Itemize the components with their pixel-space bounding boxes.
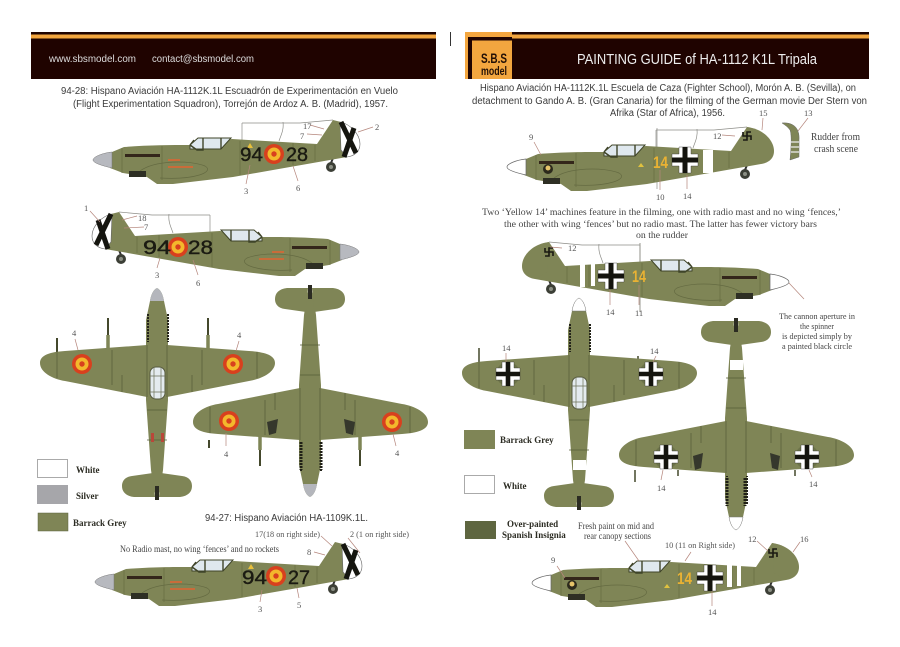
header: right banner	[465, 32, 869, 79]
aircraft: 94-28 right profile	[84, 203, 359, 288]
caption: Escuela de Caza: detachment to Gando A. B. (Gran Canaria) for the filming of the German movie Der Stern von	[472, 96, 867, 107]
aircraft: 94-28 right profile: 1	[84, 203, 88, 213]
header: left banner	[31, 32, 436, 79]
note: fresh paint: rear canopy sections	[584, 531, 651, 541]
legend: right colours: Over-painted	[507, 519, 558, 529]
caption: 94-28: 94-28: Hispano Aviación HA-1112K.1L Escuadrón de Experimentación en Vuelo	[61, 86, 398, 97]
contact email: contact@sbsmodel.com	[152, 54, 254, 65]
note: cannon aperture: The cannon aperture in	[779, 311, 856, 321]
aircraft: 94-27 profile: 5	[297, 600, 301, 610]
aircraft: 94-27 profile: 3	[258, 604, 262, 614]
aircraft: Yellow 14 left profile: 9	[529, 132, 533, 142]
aircraft: Spanish top view: 4	[72, 328, 77, 338]
S.B.S logo: model	[481, 64, 507, 78]
aircraft: Spanish top view: 4	[237, 330, 242, 340]
aircraft: 94-28 left profile: 3	[244, 186, 248, 196]
caption: Escuela de Caza: Hispano Aviación HA-1112K.1L Escuela de Caza (Fighter School), Morón A. B. (Sevilla), on	[480, 83, 856, 94]
note: fresh paint: Fresh paint on mid and	[578, 521, 654, 531]
aircraft: Yellow 14 left profile: 13	[804, 108, 812, 118]
aircraft: 94-28 left profile: 6	[296, 183, 300, 193]
aircraft: 94-28 right profile: 6	[196, 278, 200, 288]
aircraft: Yellow 14 left profile: 14	[653, 153, 668, 172]
aircraft: Yellow 14 right profile	[522, 242, 804, 318]
aircraft: Yellow 14 right profile: 14	[632, 267, 646, 286]
swatch: silver	[37, 485, 68, 504]
legend: left colours: Barrack Grey	[73, 518, 127, 528]
swatch: barrack grey	[464, 430, 495, 449]
aircraft: Yellow 14 lower profile: 16	[800, 534, 808, 544]
aircraft: Yellow 14 right profile: 14	[606, 307, 615, 317]
legend: right colours: Barrack Grey	[500, 435, 554, 445]
icon: rudder from crash scene: Rudder from	[811, 132, 860, 143]
note: two Yellow 14 machines: Two ‘Yellow 14’ machines feature in the filming, one with radio mast and no wing ‘fences,’	[482, 207, 841, 218]
icon: rudder from crash scene: crash scene	[814, 144, 859, 155]
aircraft: German bottom view: 14	[657, 483, 666, 493]
aircraft: Yellow 14 lower profile: 14	[677, 569, 692, 588]
caption: 94-28: (Flight Experimentation Squadron), Torrejón de Ardoz A. B. (Madrid), 1957.	[73, 99, 388, 110]
aircraft: Yellow 14 lower profile: 12	[748, 534, 756, 544]
swatch: white	[38, 460, 68, 478]
caption: 94-28	[61, 86, 398, 110]
aircraft: 94-28 right profile: 18	[138, 213, 146, 223]
legend: left colours	[37, 460, 127, 531]
aircraft: 94-27 profile: 27	[288, 568, 310, 589]
note: two Yellow 14 machines	[482, 207, 841, 241]
icon: rudder from crash scene	[782, 123, 860, 160]
caption: Escuela de Caza: Afrika (Star of Africa), 1956.	[610, 108, 725, 119]
aircraft: Yellow 14 lower profile: 14	[708, 607, 717, 617]
swatch: white	[464, 476, 494, 494]
note: fresh paint	[578, 521, 654, 541]
aircraft: Yellow 14 left profile	[507, 108, 812, 202]
note: two Yellow 14 machines: the other with wing ‘fences’ but no radio mast. The latter has fewer victory bars	[504, 219, 817, 230]
note: cannon aperture	[779, 311, 856, 351]
aircraft: Yellow 14 left profile: 10	[656, 192, 664, 202]
legend: right colours: White	[503, 481, 527, 491]
aircraft: Yellow 14 left profile: 12	[713, 131, 722, 141]
aircraft: 94-28 left profile: 17	[303, 121, 312, 131]
aircraft: German top view: 14	[502, 343, 511, 353]
aircraft: 94-28 right profile: 28	[188, 238, 213, 259]
aircraft: 94-28 left profile: 94	[240, 145, 263, 166]
aircraft: German top view	[462, 298, 697, 510]
swatch: over-painted	[465, 521, 496, 539]
note: cannon aperture: the spinner	[800, 321, 834, 331]
aircraft: 94-28 left profile	[93, 120, 379, 196]
aircraft: Yellow 14 lower profile: 9	[551, 555, 555, 565]
aircraft: Yellow 14 right profile: 12	[568, 243, 576, 253]
note: two Yellow 14 machines: on the rudder	[636, 231, 689, 241]
aircraft: 94-27 profile: 8	[307, 547, 311, 557]
aircraft: German bottom view: 14	[809, 479, 818, 489]
legend: left colours: Silver	[76, 491, 99, 501]
aircraft: 94-28 right profile: 94	[143, 238, 172, 259]
aircraft: Spanish bottom view: 4	[395, 448, 400, 458]
aircraft: Yellow 14 lower profile	[532, 534, 808, 617]
S.B.S logo: S.B.S	[481, 50, 507, 66]
note: cannon aperture: a painted black circle	[782, 341, 852, 351]
note: cannon aperture: is depicted simply by	[782, 331, 853, 341]
aircraft: Yellow 14 right profile: 11	[635, 308, 643, 318]
aircraft: German bottom view	[619, 318, 854, 530]
aircraft: Spanish bottom view: 4	[224, 449, 229, 459]
aircraft: 94-28 left profile: 7	[300, 131, 304, 141]
aircraft: 94-28 right profile: 7	[144, 222, 148, 232]
legend: left colours: White	[76, 465, 100, 475]
aircraft: Yellow 14 left profile: 14	[683, 191, 692, 201]
aircraft: Spanish bottom view	[193, 285, 428, 497]
aircraft: 94-28 right profile: 3	[155, 270, 159, 280]
aircraft: Yellow 14 lower profile: 10 (11 on Right side)	[665, 540, 735, 550]
aircraft: Spanish top view	[40, 288, 275, 500]
caption: Escuela de Caza	[472, 83, 867, 119]
aircraft: 94-28 left profile: 2	[375, 122, 379, 132]
aircraft: 94-27 profile: 17(18 on right side)	[255, 529, 320, 539]
caption: 94-27: 94-27: Hispano Aviación HA-1109K.1L.	[205, 513, 368, 524]
aircraft: 94-27 profile	[95, 529, 409, 614]
aircraft: 94-28 left profile: 28	[286, 145, 308, 166]
aircraft: 94-27 profile: 94	[242, 568, 268, 589]
aircraft: German top view: 14	[650, 346, 659, 356]
aircraft: Yellow 14 left profile: 15	[759, 108, 768, 118]
aircraft: 94-27 profile: 2 (1 on right side)	[350, 529, 409, 539]
swatch: barrack grey	[38, 513, 68, 531]
legend: right colours: Spanish Insignia	[502, 530, 566, 540]
website address: www.sbsmodel.com	[48, 54, 136, 65]
legend: right colours	[464, 430, 566, 540]
note: no radio mast: No Radio mast, no wing ‘fences’ and no rockets	[120, 544, 279, 554]
page title: PAINTING GUIDE of HA-1112 K1L Tripala	[577, 51, 818, 68]
S.B.S logo	[465, 32, 512, 79]
